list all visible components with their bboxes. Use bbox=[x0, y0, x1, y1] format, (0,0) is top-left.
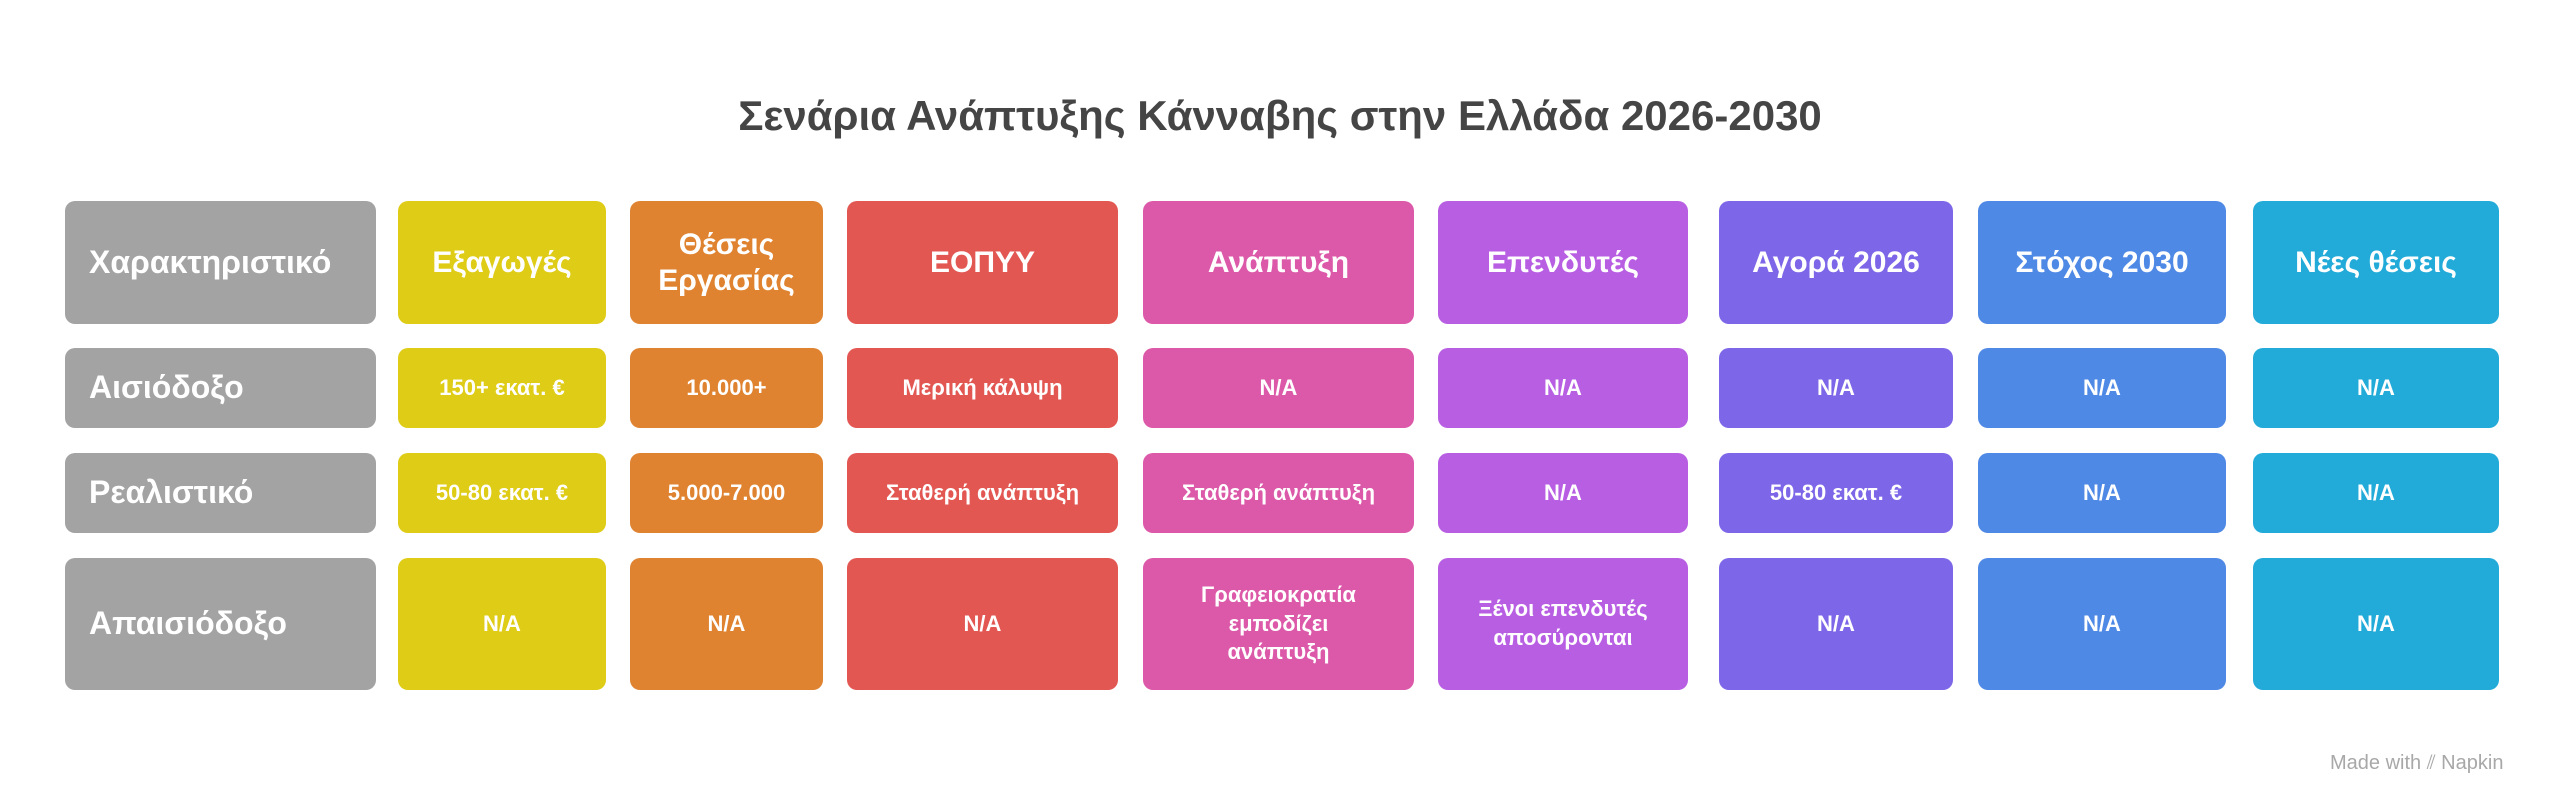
cell: N/A bbox=[964, 611, 1001, 636]
cell: 150+ εκατ. € bbox=[439, 375, 565, 400]
footer credit: Made with ⫽ Napkin bbox=[2330, 752, 2503, 774]
cell bbox=[1143, 453, 1414, 533]
header: Νέες θέσεις: Νέες θέσεις bbox=[2295, 246, 2457, 278]
row: Αισιόδοξο bbox=[65, 348, 2499, 428]
cell: N/A bbox=[1260, 375, 1297, 400]
cell: Μερική κάλυψη bbox=[902, 375, 1063, 400]
cell: 50-80 εκατ. € bbox=[1770, 480, 1902, 505]
cell bbox=[630, 558, 823, 690]
header: Επενδυτές: Επενδυτές bbox=[1487, 246, 1639, 278]
header: ΕΟΠΥΥ: ΕΟΠΥΥ bbox=[930, 246, 1035, 278]
cell: N/A bbox=[2083, 480, 2121, 505]
cell: Γραφειοκρατία bbox=[1201, 582, 1356, 607]
cell bbox=[630, 348, 823, 428]
header: Θέσεις Εργασίας: Εργασίας bbox=[658, 264, 795, 296]
header row bbox=[65, 201, 2499, 324]
cell: N/A bbox=[708, 611, 745, 636]
cell: N/A bbox=[1817, 611, 1855, 636]
cell: N/A bbox=[1544, 375, 1582, 400]
cell: N/A bbox=[1817, 375, 1855, 400]
cell bbox=[398, 453, 606, 533]
cell: N/A bbox=[2357, 480, 2395, 505]
label: Ρεαλιστικό bbox=[65, 453, 376, 533]
label: Αισιόδοξο: Αισιόδοξο bbox=[89, 369, 244, 405]
label: Απαισιόδοξο bbox=[65, 558, 376, 690]
cell: Σταθερή ανάπτυξη bbox=[1182, 480, 1375, 505]
cell: 10.000+ bbox=[686, 375, 767, 400]
cell: N/A bbox=[2357, 375, 2395, 400]
cell bbox=[2253, 453, 2499, 533]
label: Απαισιόδοξο: Απαισιόδοξο bbox=[89, 605, 287, 641]
cell bbox=[2253, 348, 2499, 428]
cell: N/A bbox=[1544, 480, 1582, 505]
cell bbox=[1978, 348, 2226, 428]
cell: N/A bbox=[2083, 611, 2121, 636]
cell: αποσύρονται bbox=[1493, 625, 1633, 650]
header: Ανάπτυξη bbox=[1143, 201, 1414, 324]
row: Απαισιόδοξο bbox=[65, 558, 2499, 690]
header: Στόχος 2030: Στόχος 2030 bbox=[2015, 246, 2189, 278]
cell: N/A bbox=[2357, 611, 2395, 636]
label: Αισιόδοξο bbox=[65, 348, 376, 428]
cell: Ξένοι επενδυτές bbox=[1478, 596, 1648, 621]
cell bbox=[398, 558, 606, 690]
header: Στόχος 2030 bbox=[1978, 201, 2226, 324]
cell bbox=[1719, 453, 1953, 533]
title: Σενάρια Ανάπτυξης Κάνναβης στην Ελλάδα 2026-2030 bbox=[738, 92, 1822, 139]
cell bbox=[1438, 558, 1688, 690]
cell bbox=[847, 453, 1118, 533]
header: Εξαγωγές bbox=[398, 201, 606, 324]
cell: εμποδίζει bbox=[1229, 611, 1328, 636]
header: Χαρακτηριστικό bbox=[65, 201, 376, 324]
header: Χαρακτηριστικό: Χαρακτηριστικό bbox=[89, 244, 331, 280]
cell: 50-80 εκατ. € bbox=[436, 480, 568, 505]
header: Ανάπτυξη: Ανάπτυξη bbox=[1208, 246, 1349, 278]
header: Επενδυτές bbox=[1438, 201, 1688, 324]
row: Ρεαλιστικό bbox=[65, 453, 2499, 533]
cell bbox=[1143, 348, 1414, 428]
cell bbox=[1438, 348, 1688, 428]
header: ΕΟΠΥΥ bbox=[847, 201, 1118, 324]
label: Ρεαλιστικό: Ρεαλιστικό bbox=[89, 474, 253, 510]
cell: N/A bbox=[2083, 375, 2121, 400]
cell bbox=[1719, 348, 1953, 428]
cell bbox=[1719, 558, 1953, 690]
cell bbox=[1978, 453, 2226, 533]
cell: 5.000-7.000 bbox=[668, 480, 785, 505]
header: Νέες θέσεις bbox=[2253, 201, 2499, 324]
cell bbox=[1438, 453, 1688, 533]
cell bbox=[1143, 558, 1414, 690]
cell: N/A bbox=[483, 611, 521, 636]
cell bbox=[398, 348, 606, 428]
cell: Σταθερή ανάπτυξη bbox=[886, 480, 1079, 505]
cell bbox=[2253, 558, 2499, 690]
cell: ανάπτυξη bbox=[1227, 639, 1329, 664]
header: Αγορά 2026: Αγορά 2026 bbox=[1752, 246, 1920, 278]
cell bbox=[847, 348, 1118, 428]
header: Θέσεις Εργασίας bbox=[630, 201, 823, 324]
cell bbox=[847, 558, 1118, 690]
cell bbox=[630, 453, 823, 533]
header: Θέσεις Εργασίας: Θέσεις bbox=[679, 228, 774, 260]
cell bbox=[1978, 558, 2226, 690]
header: Εξαγωγές: Εξαγωγές bbox=[432, 246, 572, 278]
header: Αγορά 2026 bbox=[1719, 201, 1953, 324]
